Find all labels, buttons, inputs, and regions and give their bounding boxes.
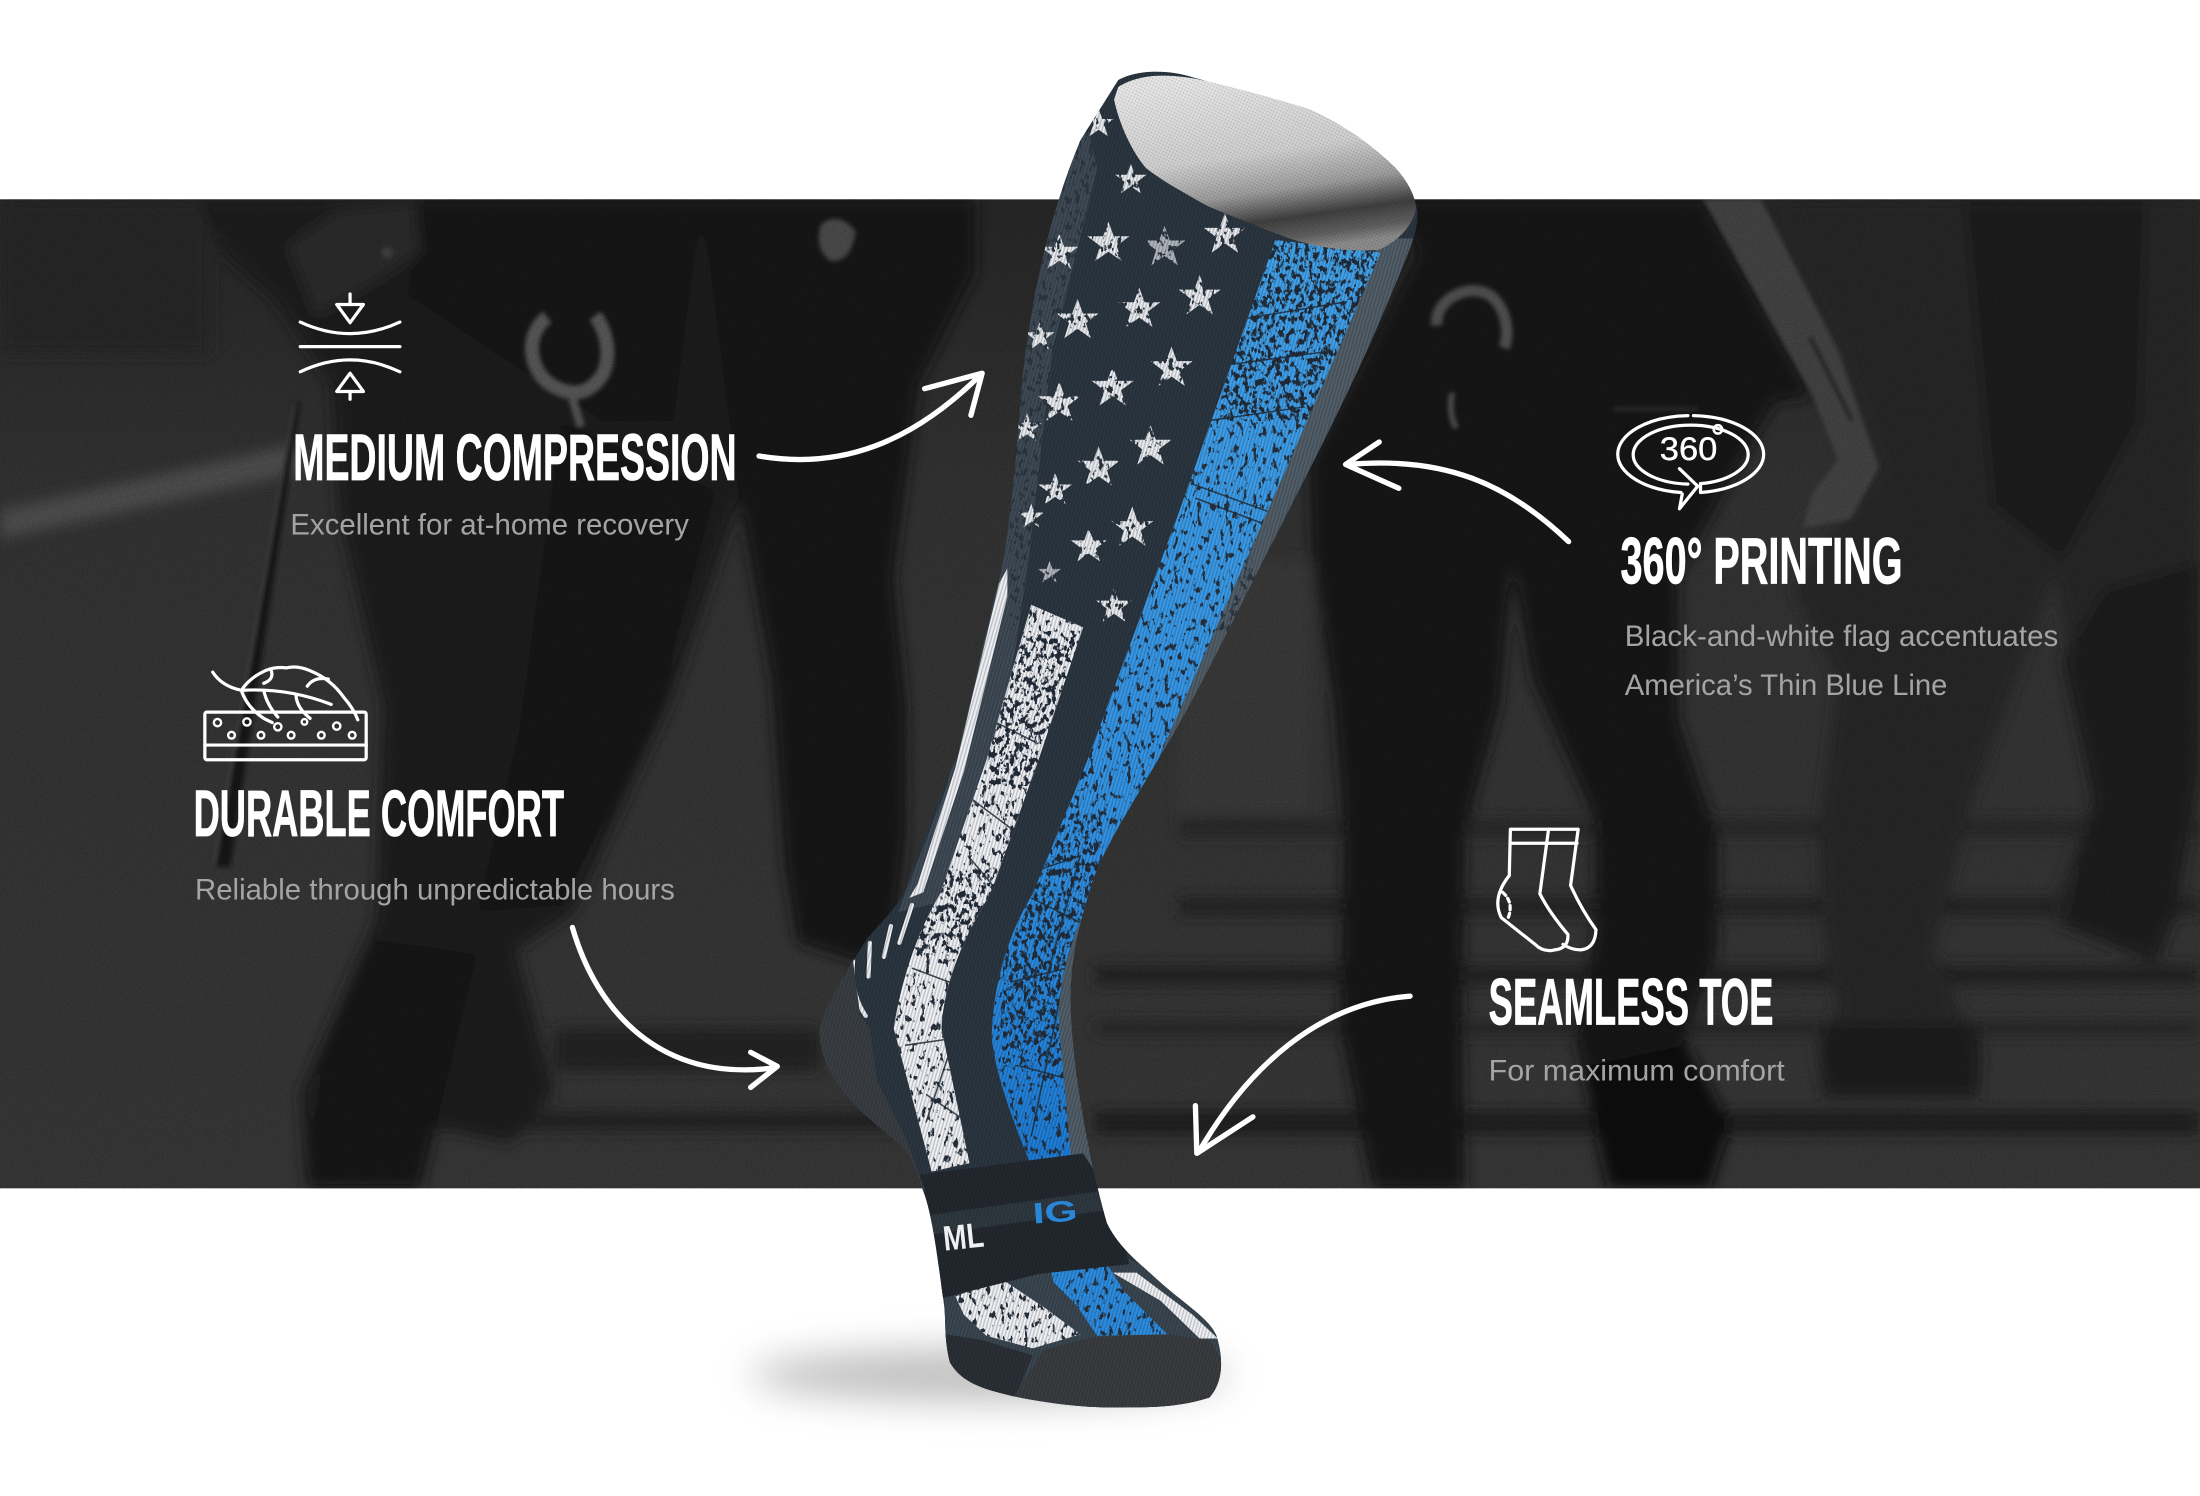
ankle band — [912, 1153, 1129, 1299]
foot white patch — [955, 1278, 1080, 1348]
belt gear and gloves — [819, 219, 856, 261]
arrow: 360 printing to sock — [1346, 442, 1569, 542]
icon: 360 degree rotation — [1618, 416, 1764, 509]
logo lettering on ankle band: ML — [941, 1216, 986, 1259]
heading: durable comfort: DURABLE COMFORT — [194, 776, 564, 850]
text: compression description: Excellent for at-home recovery — [290, 509, 689, 542]
sock body — [786, 56, 1487, 1431]
panel: background photo band of officers walking — [0, 199, 2200, 1188]
soft road light streak — [0, 443, 303, 539]
heel cup — [800, 961, 926, 1193]
foot blue patch — [1049, 1264, 1167, 1336]
belt gear tone — [288, 203, 421, 316]
icon: leaf on foam — [205, 667, 366, 760]
foot white right patch — [1113, 1273, 1218, 1339]
baton — [215, 403, 300, 867]
image: blue line flag compression sock — [751, 56, 1487, 1431]
distress specks and scratches — [884, 225, 1389, 1361]
handcuffs left — [532, 316, 607, 392]
arrow: medium compression to sock — [759, 373, 982, 460]
blue stripe — [992, 240, 1381, 1176]
film grain — [0, 199, 2200, 1188]
heel dashes — [853, 905, 912, 1016]
text: comfort description: Reliable through unpredictable hours — [195, 873, 675, 906]
right edge band — [1059, 239, 1445, 1235]
arrow: seamless toe to foot — [1195, 996, 1410, 1153]
toe cap — [1013, 1334, 1232, 1412]
heading: seamless toe: SEAMLESS TOE — [1489, 964, 1773, 1038]
text: printing description: Black-and-white flag accentuates — [1625, 620, 2058, 653]
officer left, front — [198, 199, 739, 1188]
officer far right — [1761, 199, 2200, 1092]
logo lettering on ankle band — [941, 1195, 1079, 1259]
logo lettering on ankle band: IG — [1032, 1195, 1079, 1231]
arrow: durable comfort to heel — [572, 927, 777, 1087]
thin edge white stripe — [909, 568, 1007, 898]
text: toe description: For maximum comfort — [1489, 1054, 1785, 1087]
floor shadow — [751, 1348, 1228, 1402]
heading: medium compression: MEDIUM COMPRESSION — [293, 420, 737, 494]
text: printing description — [1625, 620, 2058, 702]
left edge band — [898, 126, 1097, 912]
arm — [1703, 199, 1879, 528]
text: printing description: America’s Thin Blue Line — [1625, 669, 1947, 702]
knit rib texture — [786, 56, 1487, 1431]
stars — [1012, 109, 1246, 622]
white stripe — [894, 605, 1083, 1172]
icon: compression arrows and curves — [300, 294, 400, 399]
foot base — [912, 1256, 1235, 1417]
officer centre right — [1309, 199, 1813, 1188]
officer left, rear leg — [702, 199, 975, 963]
handcuffs right — [1437, 291, 1507, 348]
heading: 360 printing: 360° PRINTING — [1621, 524, 1903, 598]
icon: pair of socks — [1498, 829, 1596, 951]
sock opening interior — [1114, 76, 1416, 251]
worn star texture — [1010, 98, 1256, 631]
icon: 360 degree rotation: 360 — [1660, 431, 1717, 467]
